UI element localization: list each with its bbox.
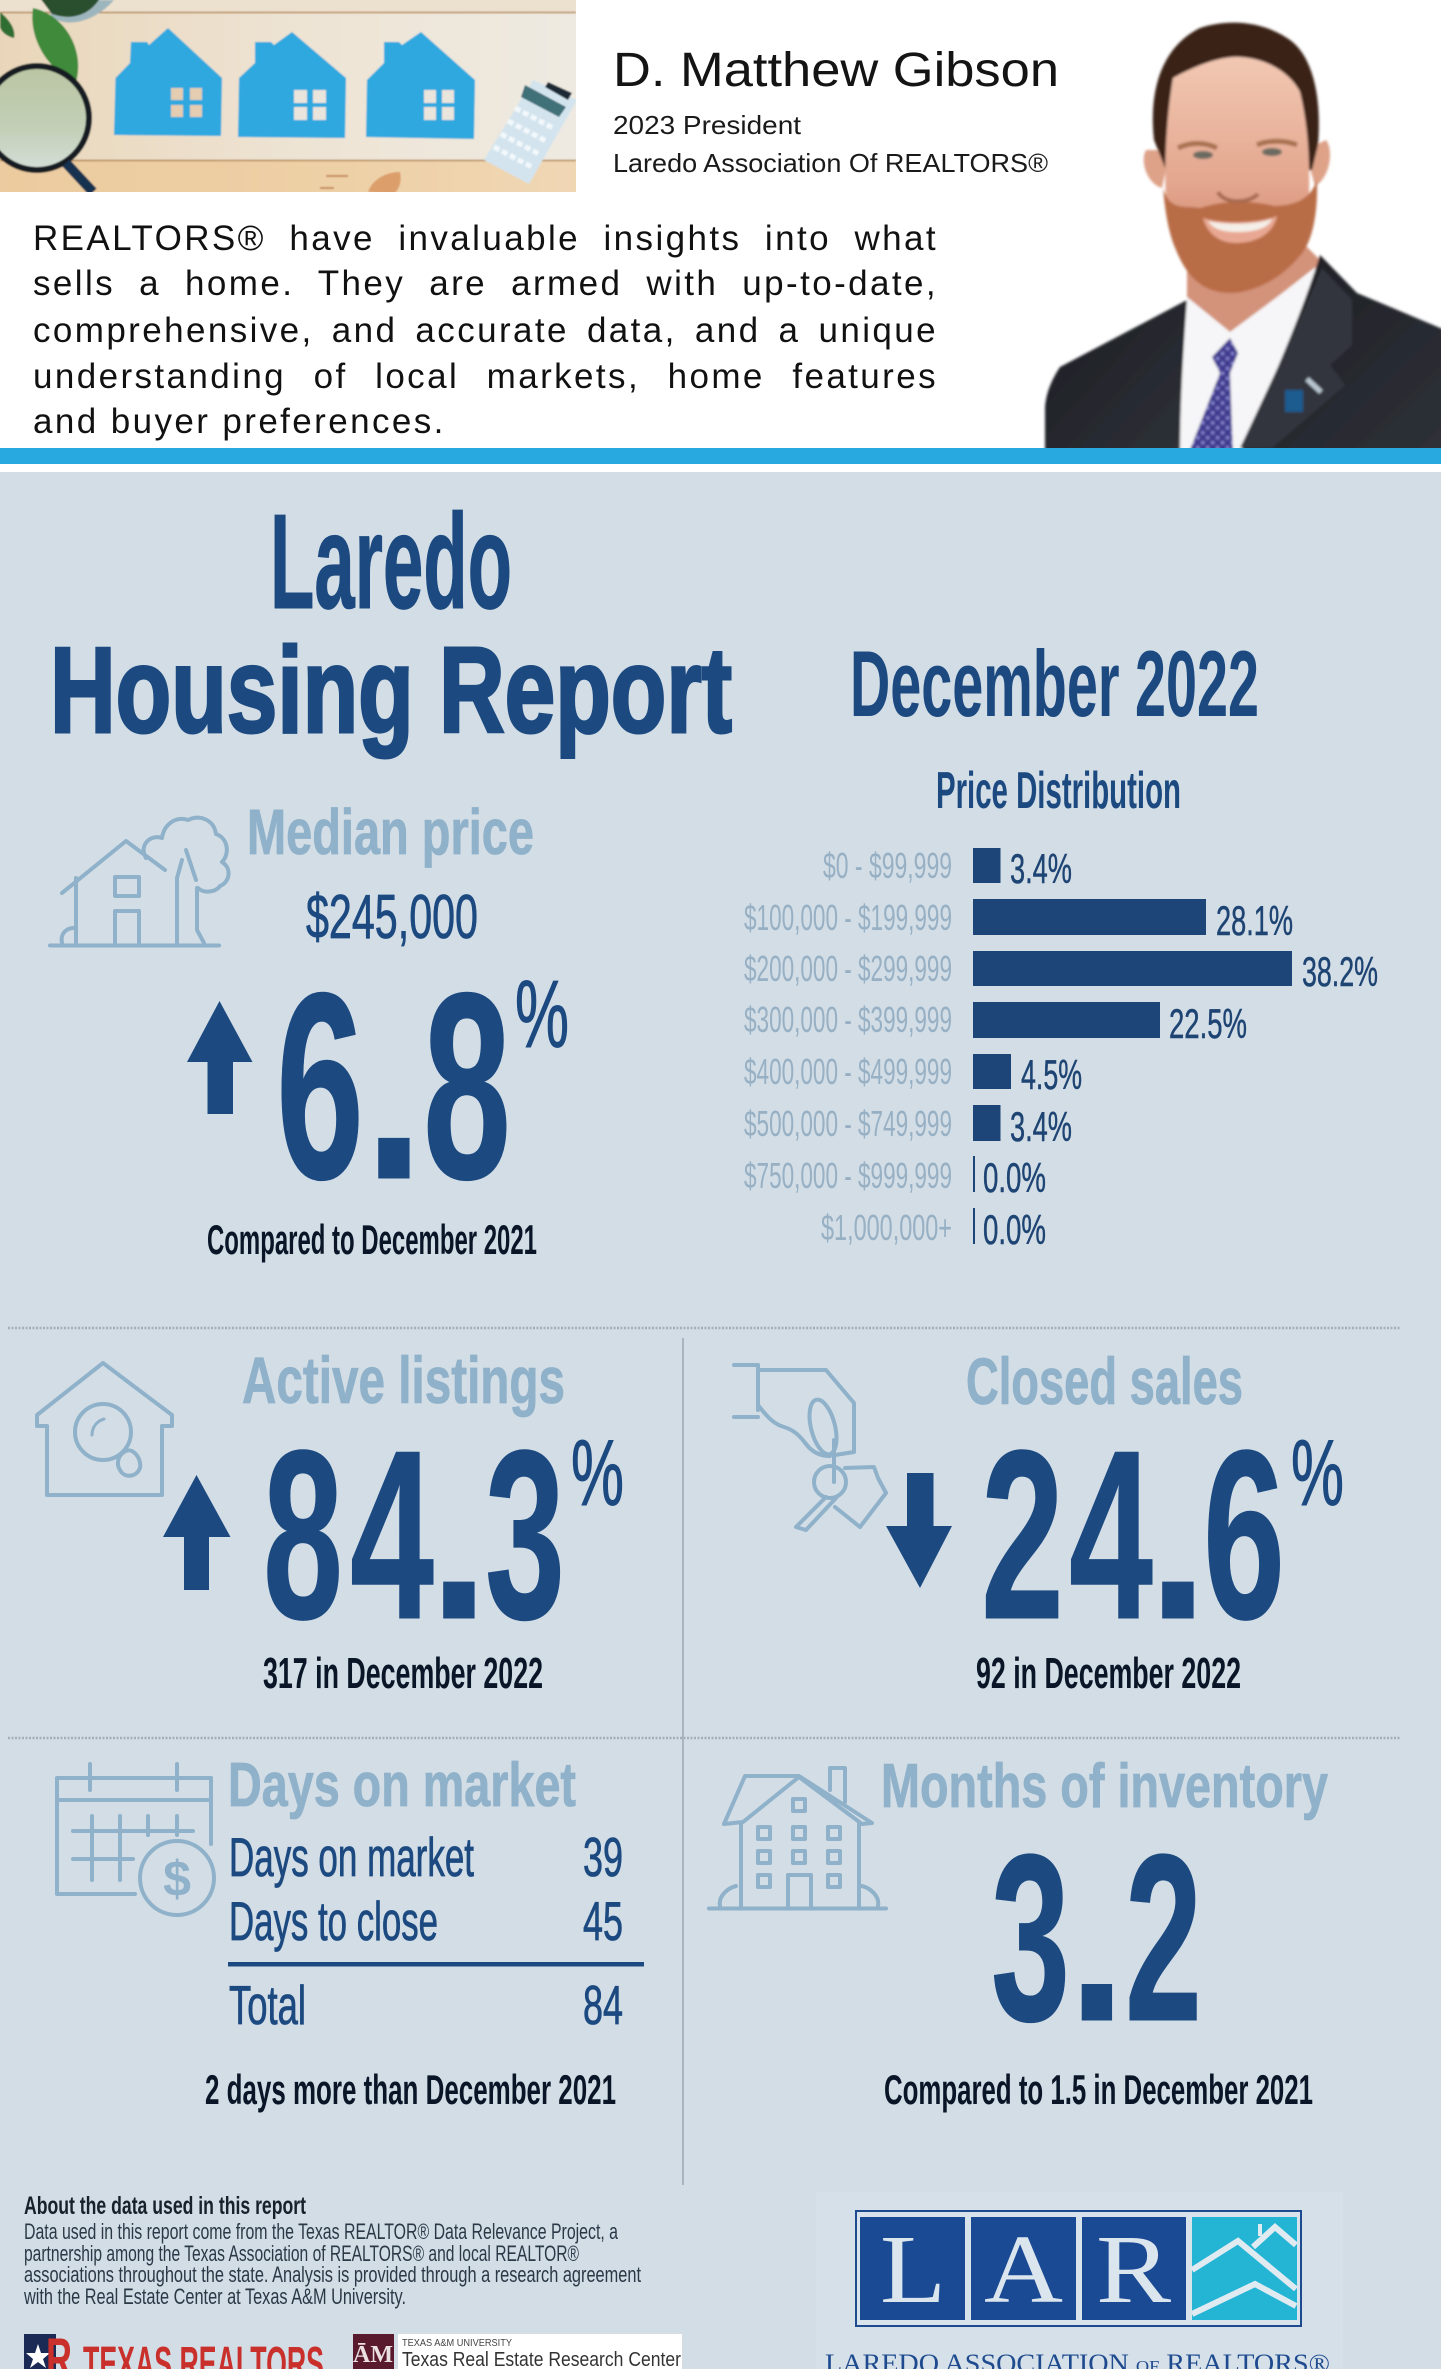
- text block: about the data: [23, 2192, 641, 2309]
- bar chart: price ranges: $0 - $99,999: [823, 845, 952, 886]
- stat: 84.3 percent: 4: [350, 1401, 434, 1670]
- table: days breakdown: [228, 1826, 644, 2036]
- text block: realtor insights paragraph: and buyer preferences.: [33, 402, 446, 441]
- table: days breakdown: Total: [229, 1974, 306, 2036]
- table: days breakdown: Days to close: [229, 1890, 438, 1952]
- icon: multi-storey house: [709, 1768, 886, 1908]
- note: active listings count: 317 in December 2022: [263, 1649, 543, 1698]
- table: days breakdown: 84: [583, 1974, 623, 2036]
- stat: 84.3 percent: [263, 1401, 565, 1670]
- president title: Laredo Association Of REALTORS®: [613, 148, 1048, 178]
- panel: active listings: [37, 1343, 624, 1698]
- bar chart: price ranges: $200,000 - $299,999: [744, 948, 952, 989]
- bar chart: price ranges: [744, 845, 1378, 1253]
- bar chart: price ranges: $1,000,000+: [821, 1207, 952, 1248]
- text block: realtor insights paragraph: sells a home. They are armed with up-to-date,: [33, 264, 938, 303]
- bar chart: price ranges: 3.4%: [1010, 1103, 1072, 1150]
- panel: months of inventory: [709, 1752, 1328, 2113]
- panel: price distribution: [744, 762, 1378, 1253]
- icon: house with tree: [50, 818, 229, 946]
- icon: calendar with dollar coin: $: [163, 1851, 191, 1907]
- icon: calendar with dollar coin: [57, 1764, 214, 1915]
- stat: 3.2 months: 3: [991, 1806, 1070, 2071]
- logo: Texas A&M Real Estate Research Center: [353, 2334, 682, 2369]
- title: Laredo Housing Report: Housing Report: [50, 622, 732, 758]
- bar chart: price ranges: 0.0%: [983, 1206, 1046, 1253]
- title: Laredo Housing Report: Laredo: [270, 486, 512, 637]
- comparison note: Compared to December 2021: [207, 1216, 537, 1263]
- table: days breakdown: 45: [583, 1890, 623, 1952]
- logo: Laredo Association of Realtors: [816, 2192, 1343, 2369]
- icon: hand holding keys: [734, 1365, 886, 1530]
- stat: 24.6 percent: 2: [981, 1401, 1064, 1670]
- icon: up arrow: [187, 1001, 252, 1114]
- stat: 6.8 percent: 6: [276, 938, 364, 1235]
- heading: Price Distribution: Price Distribution: [936, 762, 1181, 820]
- bar chart: price ranges: 38.2%: [1302, 948, 1378, 995]
- bar chart: price ranges: $300,000 - $399,999: [744, 999, 952, 1040]
- bar chart: price ranges: 4.5%: [1021, 1051, 1082, 1098]
- title: Laredo Housing Report: [50, 486, 732, 758]
- stat: 6.8 percent: 8: [423, 938, 511, 1235]
- icon: up arrow: [163, 1475, 230, 1590]
- icon: down arrow: [886, 1473, 952, 1588]
- logo: Texas A&M Real Estate Research Center: TEXAS A&M UNIVERSITY: [402, 2338, 512, 2349]
- stat: 3.2 months: [991, 1806, 1202, 2071]
- text block: about the data: About the data used in this report: [24, 2192, 306, 2220]
- heading: Active listings: Active listings: [242, 1343, 565, 1417]
- president name: D. Matthew Gibson: [613, 44, 1059, 97]
- bar chart: price ranges: $500,000 - $749,999: [744, 1103, 952, 1144]
- bar chart: price ranges: 3.4%: [1010, 845, 1072, 892]
- heading: Days on market: Days on market: [228, 1751, 576, 1820]
- stat: 24.6 percent: 6: [1203, 1401, 1285, 1670]
- bar chart: price ranges: $100,000 - $199,999: [744, 897, 952, 938]
- president title: [613, 110, 1048, 178]
- bar chart: price ranges: $400,000 - $499,999: [744, 1051, 952, 1092]
- logo: Texas Realtors: [24, 2327, 324, 2369]
- stat: 6.8 percent: [276, 938, 511, 1235]
- text block: about the data: associations throughout the state. Analysis is provided through a research agreement: [24, 2262, 641, 2287]
- stat: 6.8 percent: .: [364, 938, 424, 1235]
- percent sign: %: [1291, 1420, 1344, 1525]
- note: days comparison: 2 days more than December 2021: [205, 2066, 616, 2113]
- text block: about the data: partnership among the Texas Association of REALTORS® and local REALTOR®: [24, 2241, 579, 2266]
- logo: Texas A&M Real Estate Research Center: ĀM: [353, 2342, 393, 2368]
- stat: 24.6 percent: 4: [1069, 1401, 1153, 1670]
- stat: 24.6 percent: .: [1148, 1401, 1208, 1670]
- heading: Closed sales: Closed sales: [966, 1344, 1243, 1418]
- logo: Laredo Association of Realtors: L: [880, 2216, 946, 2324]
- president title: 2023 President: [613, 110, 802, 140]
- text block: about the data: with the Real Estate Center at Texas A&M University.: [23, 2284, 406, 2309]
- stat: 84.3 percent: .: [429, 1401, 489, 1670]
- icon: house with magnifier: [37, 1363, 172, 1495]
- text block: realtor insights paragraph: [33, 219, 938, 441]
- logo: Laredo Association of Realtors: R: [1096, 2216, 1172, 2324]
- bar chart: price ranges: 28.1%: [1216, 897, 1293, 944]
- logo: Laredo Association of Realtors: A: [984, 2216, 1063, 2324]
- stat: 84.3 percent: 3: [485, 1401, 565, 1670]
- stat: 84.3 percent: 8: [263, 1401, 343, 1670]
- panel: median price: [50, 796, 569, 1263]
- portrait: D. Matthew Gibson: [1045, 23, 1441, 455]
- value: median price: $245,000: [306, 883, 478, 952]
- stat: 3.2 months: 2: [1125, 1806, 1202, 2071]
- text block: about the data: Data used in this report come from the Texas REALTOR® Data Relevance Project, a: [24, 2219, 619, 2244]
- panel: days on market: [57, 1751, 644, 2113]
- stat: 3.2 months: .: [1068, 1806, 1126, 2071]
- table: days breakdown: 39: [583, 1826, 623, 1888]
- percent sign: %: [571, 1420, 624, 1525]
- table: days breakdown: Days on market: [229, 1826, 474, 1888]
- text block: realtor insights paragraph: REALTORS® have invaluable insights into what: [33, 219, 938, 258]
- percent sign: %: [515, 961, 569, 1068]
- bar chart: price ranges: 22.5%: [1169, 1000, 1247, 1047]
- panel: closed sales: [734, 1344, 1344, 1698]
- note: closed sales count: 92 in December 2022: [976, 1649, 1241, 1698]
- heading: Median price: Median price: [247, 796, 534, 868]
- accent bar: [0, 448, 1441, 464]
- text block: realtor insights paragraph: understanding of local markets, home features: [33, 357, 938, 396]
- bar chart: price ranges: $750,000 - $999,999: [744, 1155, 952, 1196]
- bar chart: price ranges: 0.0%: [983, 1154, 1046, 1201]
- text block: realtor insights paragraph: comprehensive, and accurate data, and a unique: [33, 311, 938, 350]
- photo: paper houses on a wooden table: [0, 0, 585, 200]
- stat: 24.6 percent: [981, 1401, 1285, 1670]
